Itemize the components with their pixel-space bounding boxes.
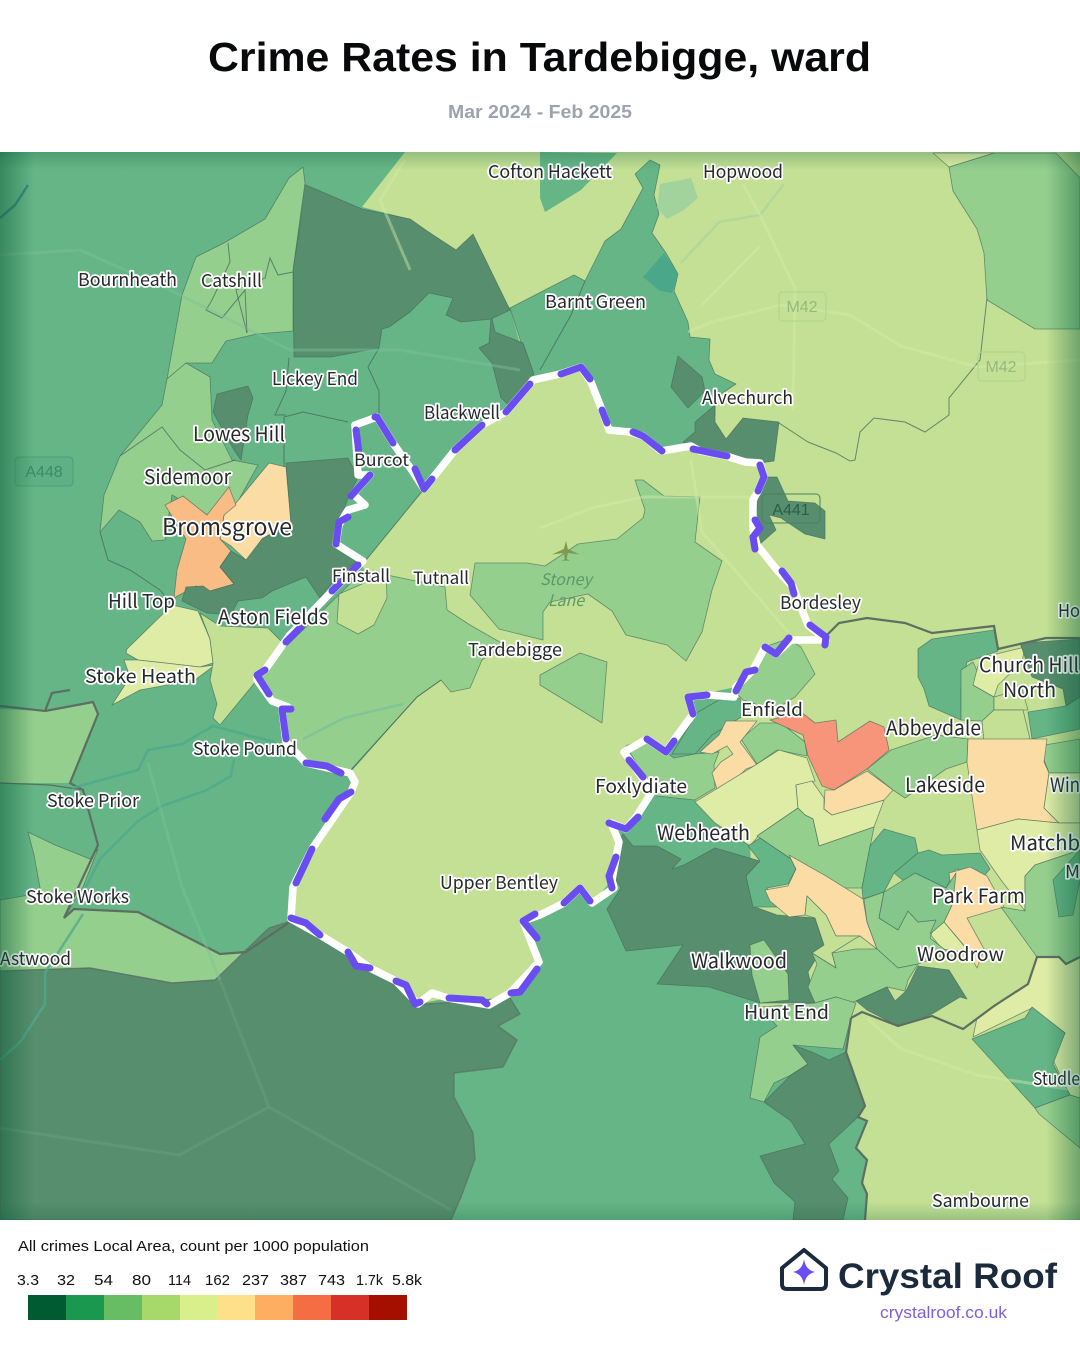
ward mid-green areas [257,572,505,771]
place name labels: Sidemoor [144,461,231,490]
subtitle: date range: Mar 2024 - Feb 2025 [448,102,632,122]
place name labels: M [1065,858,1080,884]
south-west [0,702,98,783]
place name labels: Stoke Pound [193,735,297,761]
icon: house with star [782,1250,826,1289]
place name labels: Hill Top [108,587,175,614]
place name labels: Walkwood [691,945,787,974]
place name labels: Enfield [741,696,803,722]
place name labels: Astwood [0,945,71,971]
label: Stoney Lane: Stoney [540,566,594,590]
ward boundary: white line with purple dashes [257,367,826,1005]
label: Stoney Lane: Lane [548,587,586,611]
place name labels: Sambourne [932,1187,1029,1213]
place name labels: Upper Bentley [440,869,559,895]
legend scale values: 162 [205,1272,230,1289]
icon: airport plane [552,541,580,561]
label: Stoney Lane [540,566,594,611]
legend scale values [17,1272,423,1289]
place name labels: Lowes Hill [193,418,285,447]
place name labels: Lickey End [272,365,358,391]
legend scale values: 3.3 [17,1272,39,1289]
legend scale values: 5.8k [392,1272,423,1289]
legend scale values: 387 [280,1272,307,1289]
road shields: M42 [786,299,818,316]
choropleth map [0,152,1080,1220]
place name labels: Finstall [332,562,390,587]
roads [0,160,1080,1210]
place name labels: Stoke Heath [85,662,196,689]
place name labels: Hunt End [744,998,829,1025]
place name labels: Bromsgrove [162,508,292,542]
place name labels: Catshill [201,267,262,293]
west: Bromsgrove [293,183,534,406]
legend scale values: 54 [94,1272,113,1289]
place name labels: Foxlydiate [595,772,687,799]
road shields: A441 [772,502,810,519]
north: Barnt Green and top right [510,160,736,453]
place name labels: Burcot [354,446,410,471]
place name labels: North [1003,674,1056,703]
legend colour bar [28,1295,407,1320]
place name labels: Stoke Prior [47,787,140,813]
legend [17,1238,423,1320]
road shields [15,292,1025,523]
place name labels: Aston Fields [218,601,328,630]
east: Redditch wards [607,834,824,1003]
logo: Crystal Roof [782,1250,1057,1322]
place name labels: Webheath [657,817,750,846]
place name labels: Tardebigge [468,636,562,662]
place name labels: Bournheath [78,266,177,292]
website url: crystalroof.co.uk [880,1304,1008,1322]
place name labels: Tutnall [413,564,469,589]
place name labels: Barnt Green [545,288,646,314]
place name labels: Park Farm [932,880,1025,909]
place name labels: Cofton Hackett [488,158,612,184]
road shields: M42 [985,359,1017,376]
place name labels: Blackwell [424,399,500,425]
place name labels: Abbeydale [886,712,981,741]
rivers [0,184,784,1060]
legend scale values: 743 [318,1272,345,1289]
place name labels: Bordesley [780,589,862,615]
place name labels [0,158,1080,1213]
place name labels: Stoke Works [26,883,129,909]
map edge vignette [0,152,1080,1220]
legend scale values: 32 [57,1272,75,1289]
legend scale values: 237 [242,1272,269,1289]
legend title: All crimes Local Area, count per 1000 population [18,1238,369,1255]
legend scale values: 114 [168,1272,191,1289]
road shields: A448 [25,464,63,481]
legend scale values: 80 [132,1272,151,1289]
place name labels: Hopwood [703,158,783,184]
place name labels: Woodrow [917,940,1004,967]
wordmark: Crystal Roof [838,1257,1057,1296]
title: Crime Rates in Tardebigge, ward [208,34,871,80]
legend scale values: 1.7k [356,1272,383,1289]
place name labels: Matchb [1010,827,1080,856]
place name labels: Church Hill [979,649,1079,678]
place name labels: Lakeside [905,769,985,798]
place name labels: Alvechurch [702,384,793,410]
